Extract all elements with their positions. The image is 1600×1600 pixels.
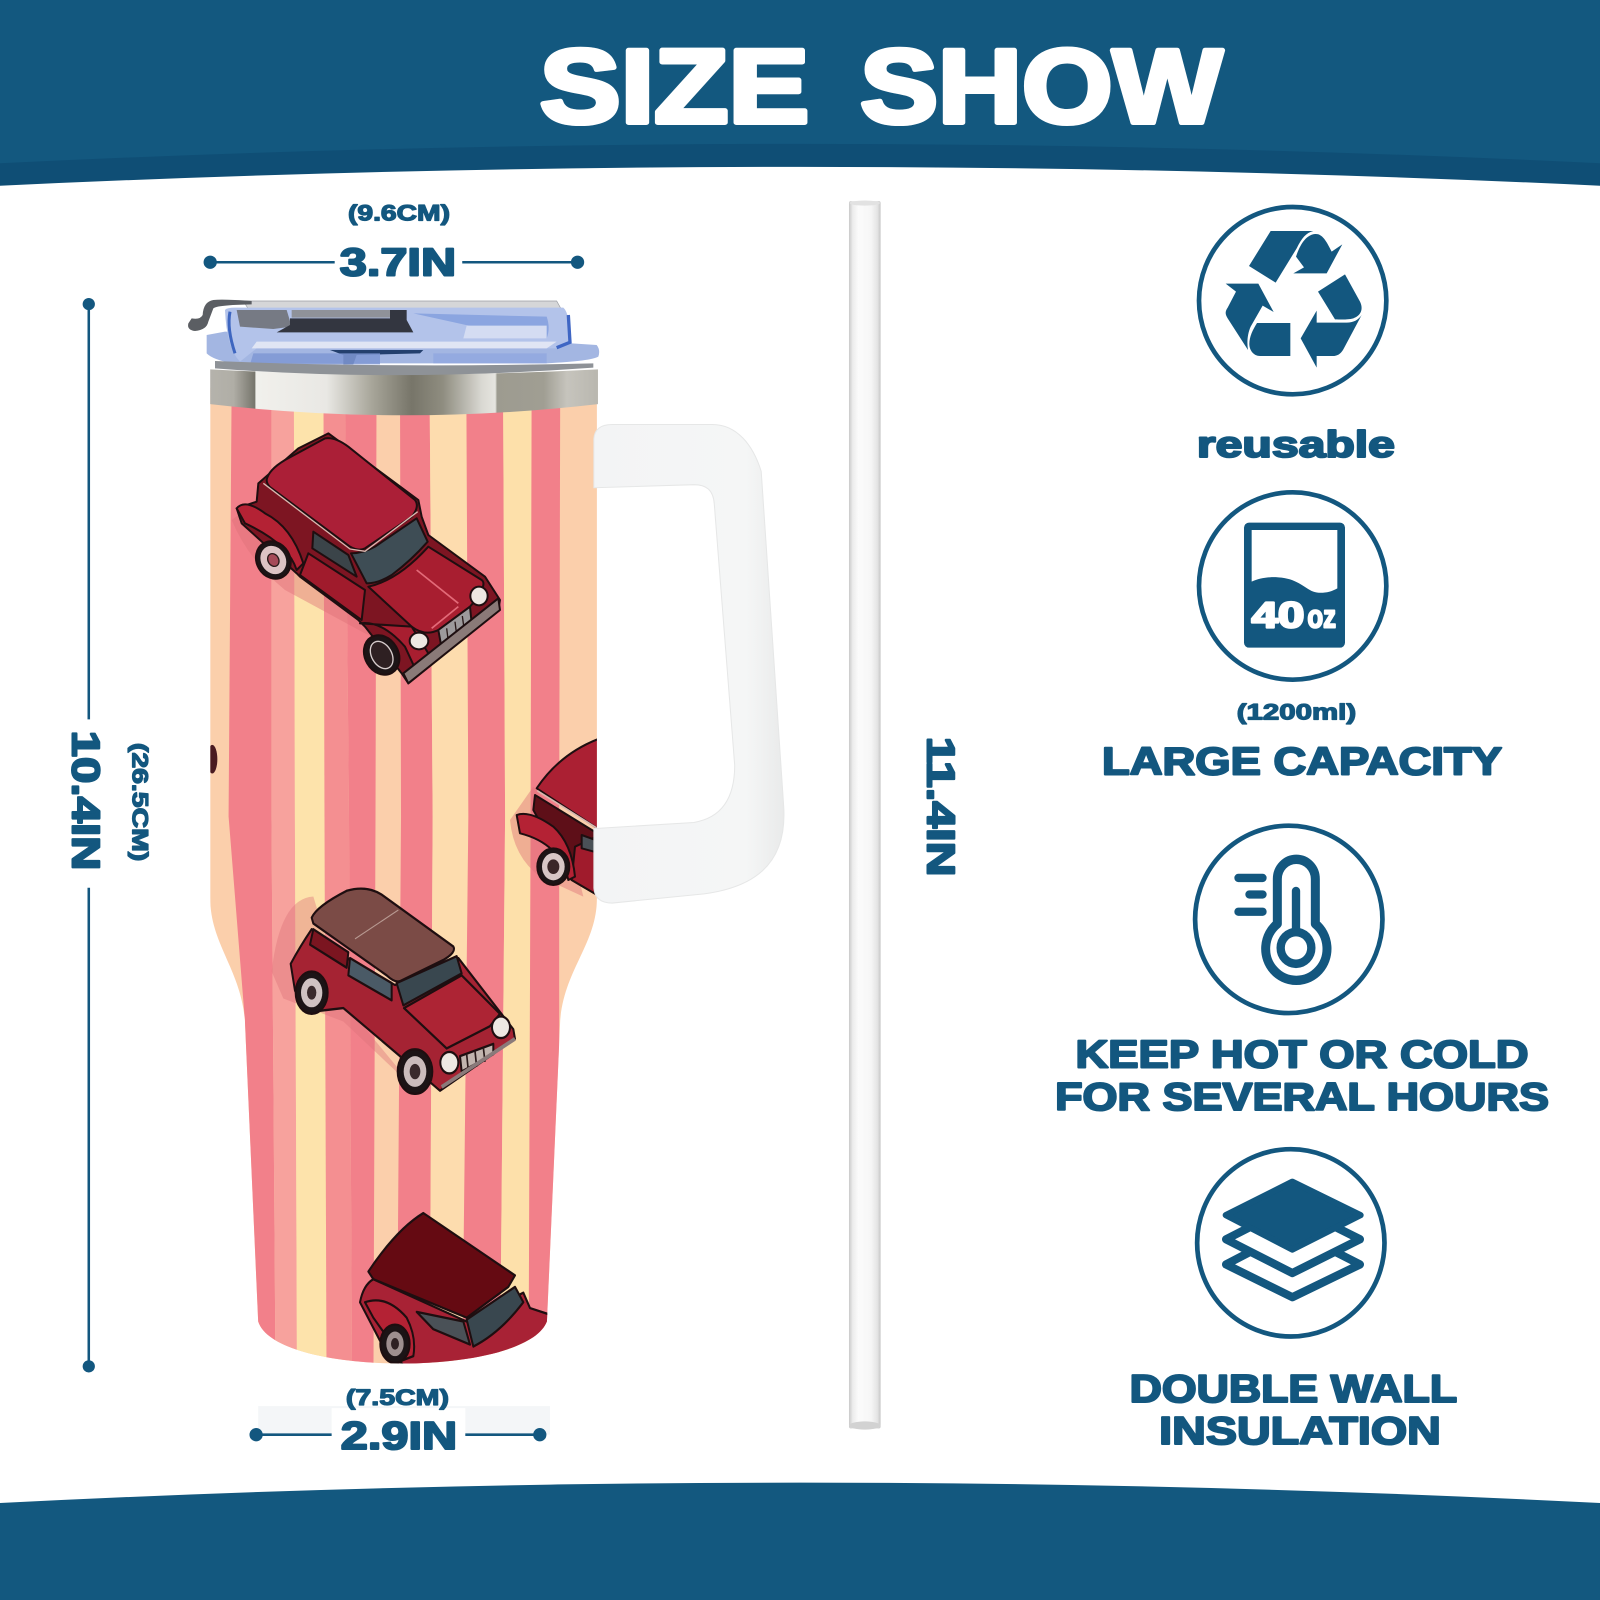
- double wall label: [1130, 1367, 1457, 1453]
- end dot: [249, 1428, 263, 1441]
- keep hot label: [1055, 1032, 1549, 1119]
- clear lid: [188, 300, 599, 375]
- lid top rim: [243, 301, 563, 312]
- height dimension: [63, 298, 153, 1372]
- width in cm: (7.5CM): [346, 1385, 449, 1410]
- icon: layers: [1197, 1149, 1384, 1337]
- height in inches: 10.4IN: [63, 731, 107, 870]
- end dot: [83, 1360, 95, 1372]
- line two: INSULATION: [1159, 1409, 1441, 1453]
- 40 label: 40: [1252, 594, 1304, 635]
- icon: thermometer: [1195, 826, 1382, 1013]
- car: brown roof car: [272, 889, 515, 1094]
- lid highlights: [413, 313, 549, 338]
- lid grey ring: [215, 361, 593, 375]
- footer banner: [0, 1483, 1600, 1600]
- steel rim: [210, 369, 598, 415]
- title: [540, 28, 1223, 145]
- line one: KEEP HOT OR COLD: [1076, 1032, 1529, 1076]
- end dot: [83, 298, 95, 310]
- icon: recycle: [1199, 207, 1386, 394]
- lid upper: [225, 308, 571, 362]
- tumbler: [188, 300, 784, 1378]
- label backing: [332, 1408, 465, 1459]
- width in inches: 2.9IN: [341, 1414, 457, 1458]
- width in cm: (9.6CM): [348, 200, 450, 225]
- top width dimension: [204, 200, 584, 285]
- line one: DOUBLE WALL: [1130, 1367, 1457, 1411]
- height in cm: (26.5CM): [128, 743, 153, 861]
- car: red top car: [232, 433, 500, 683]
- oz label: oz: [1307, 597, 1336, 634]
- car: partial car at handle: [510, 738, 600, 897]
- faint backing strip: [258, 1406, 550, 1435]
- line two: FOR SEVERAL HOURS: [1055, 1075, 1549, 1119]
- straw length: 11.4IN: [919, 737, 963, 877]
- icon: 40oz capacity: [1199, 492, 1386, 680]
- large capacity label: LARGE CAPACITY: [1102, 739, 1502, 783]
- end dot: [204, 256, 217, 269]
- car: bottom dark roof car: [360, 1213, 553, 1368]
- width in inches: 3.7IN: [340, 241, 456, 285]
- tumbler handle: [594, 424, 784, 903]
- title: SHOW: [860, 28, 1223, 145]
- lid slider: [277, 310, 413, 332]
- dimension line: [210, 261, 578, 263]
- bottom width dimension: [249, 1385, 550, 1459]
- reusable label: reusable: [1197, 424, 1395, 465]
- car: small edge fragment: [210, 744, 218, 774]
- straw: [849, 201, 881, 1430]
- lid tab: [188, 300, 252, 331]
- dimension line: [256, 1433, 540, 1436]
- lid flange: [207, 332, 599, 363]
- end dot: [533, 1428, 546, 1441]
- title: SIZE: [540, 28, 809, 145]
- dimension line: [88, 304, 90, 1366]
- capacity in ml: (1200ml): [1237, 699, 1356, 724]
- tumbler body with stripes: [204, 388, 612, 1378]
- end dot: [571, 256, 584, 269]
- header banner: [0, 0, 1600, 186]
- lid dark interior: [237, 310, 292, 329]
